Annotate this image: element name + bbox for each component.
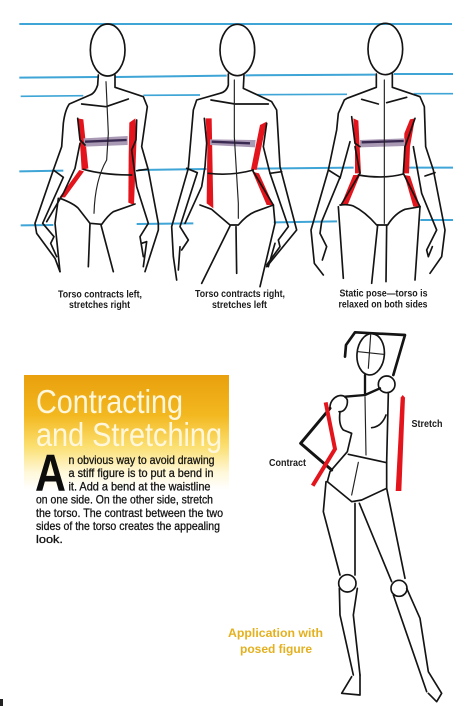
body text: n obvious way to avoid drawing	[68, 453, 214, 467]
heading	[36, 383, 222, 453]
label: contract: Contract	[269, 458, 307, 469]
bust band	[360, 138, 405, 147]
hair and raised arm	[345, 332, 405, 375]
red stretch marker	[396, 395, 405, 491]
caption: figure 2	[195, 289, 285, 311]
caption: application with posed figure: posed figure	[240, 642, 312, 656]
shoulder joints	[330, 376, 395, 412]
red contour marks	[206, 118, 273, 208]
bust band	[210, 139, 256, 147]
bent arm on hip	[301, 408, 332, 470]
figure 1: torso contracts left, stretches right	[35, 24, 158, 272]
body outline	[172, 24, 297, 287]
figure 2: torso contracts right, stretches left	[172, 24, 297, 287]
red contour marks	[341, 118, 420, 207]
bust band	[83, 136, 128, 147]
posed figure application	[301, 332, 442, 702]
caption: figure 2: Torso contracts right,	[195, 289, 285, 300]
centre line	[234, 80, 238, 218]
caption: application with posed figure	[228, 626, 323, 656]
page number fragment	[0, 699, 3, 706]
neck and shoulders	[345, 375, 380, 397]
body outline	[35, 24, 158, 272]
head with construction cross	[355, 333, 386, 376]
body outline	[311, 23, 445, 283]
figure 3: static pose, relaxed on both sides	[311, 23, 445, 283]
gradient panel background	[24, 375, 229, 490]
body text: look.	[36, 534, 63, 546]
red contour marks	[59, 118, 137, 205]
caption: figure 1: Torso contracts left,	[58, 290, 142, 300]
caption: application with posed figure: Application with	[228, 626, 323, 640]
centre line	[94, 82, 108, 213]
caption: figure 1	[58, 290, 142, 311]
caption: figure 3: Static pose—torso is	[340, 288, 428, 300]
blue proportion guide lines	[19, 24, 453, 225]
body text: it. Add a bend at the waistline	[68, 480, 211, 494]
caption: figure 3	[338, 288, 428, 310]
body text: sides of the torso creates the appealing	[36, 519, 220, 533]
body text: a stiff figure is to put a bend in	[68, 466, 214, 480]
body text: on one side. On the other side, stretch	[36, 492, 213, 506]
red contract marker	[313, 402, 335, 486]
torso	[327, 393, 405, 578]
centre line	[383, 80, 386, 223]
caption: figure 1: stretches right	[69, 300, 131, 311]
body text: the torso. The contrast between the two	[36, 506, 223, 520]
caption: figure 2: stretches left	[212, 300, 268, 311]
heading: and Stretching	[36, 416, 222, 453]
drop cap: A	[35, 445, 66, 503]
heading: Contracting	[36, 383, 183, 420]
label: stretch: Stretch	[412, 419, 442, 430]
body text	[36, 453, 223, 546]
text panel: contracting and stretching	[24, 375, 229, 546]
legs	[323, 482, 442, 702]
caption: figure 3: relaxed on both sides	[338, 300, 428, 310]
